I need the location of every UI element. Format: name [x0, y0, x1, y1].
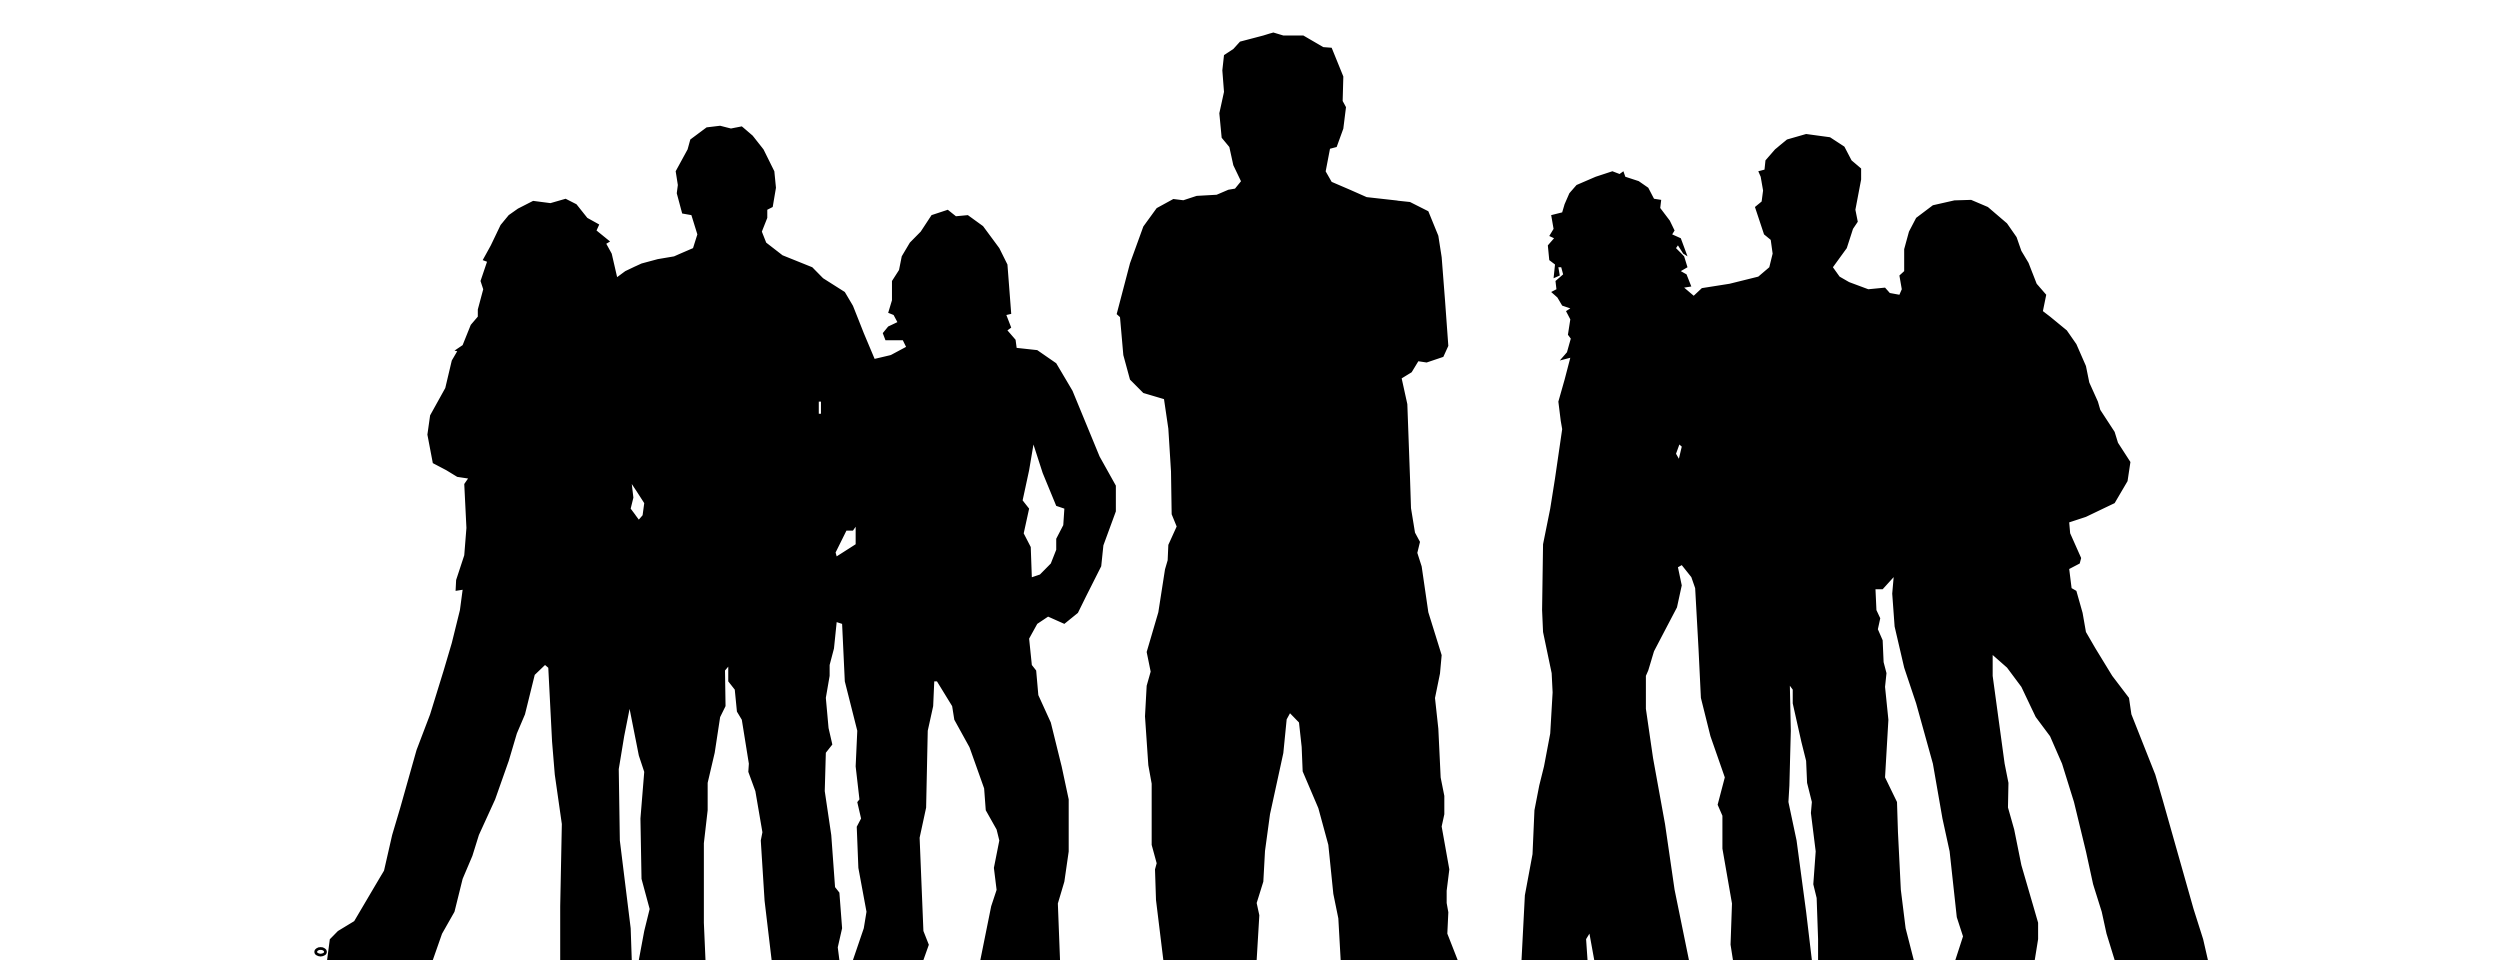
silhouette: tall centre man — [1117, 32, 1458, 960]
silhouette: left trio — [316, 126, 1116, 960]
silhouette: right trio — [1522, 134, 2208, 960]
